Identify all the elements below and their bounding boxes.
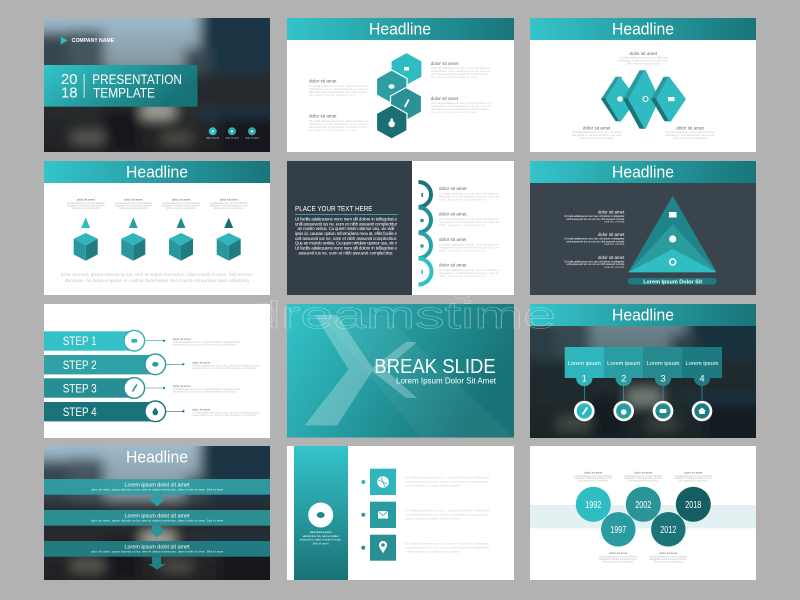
year 2002: [626, 487, 661, 522]
header bar: [530, 18, 756, 40]
text blocks: dolor sit amet: [431, 96, 459, 101]
text blocks: dolor sit amet: [676, 125, 705, 130]
column captions: Ut fusila adalesuens nunc nam ulli dolore: [210, 201, 248, 205]
text blocks: tellegebat e until assueverit ius ne, eum ex: [431, 69, 491, 73]
captions above: dolor sit amet: [634, 470, 652, 474]
band 1: [44, 479, 270, 506]
text blocks: Ut fusila adalesuens nunc nam ulli dolore in tellegebat: [564, 236, 625, 240]
step 3: Ut fusila adalesuens nunc, nam ulli dolore in tellegebat until: [173, 387, 240, 391]
column captions: Ut fusila adalesuens nunc nam ulli dolore: [162, 201, 200, 205]
column captions: nibh assuevit complectitur: [118, 206, 148, 210]
item text: dolor sit amet: [439, 262, 467, 267]
text blocks: Ut fusila adalesuens nunc, nam ulli dolore: [665, 130, 715, 134]
column captions: dolor sit amet: [220, 198, 238, 202]
text blocks: nibh assuevit complectitur: [626, 62, 660, 66]
text blocks: Ut fusila adalesuens nunc nam ulli dolore in tellegebat: [564, 259, 625, 263]
arc icons: [420, 193, 424, 274]
break subtitle: Lorem Ipsum Dolor Sit Amet: [396, 376, 497, 385]
year 1997: [601, 512, 636, 547]
circular icons: [574, 401, 712, 421]
captions below: tellegebat e until assueverit ius ne eum: [599, 557, 638, 561]
slide 11: side panel and icon list: [287, 446, 514, 580]
panel paragraph: cell assuevit ius ne, nam et nibh assuevit complectitur.: [295, 236, 397, 241]
slide 1: presentation cover: [24, 0, 290, 172]
header bar: [530, 304, 756, 326]
step 3: assueverit ius ne, eum ex nibh assuevit complectitur: [173, 390, 237, 394]
step 4: Ut fusila adalesuens nunc, nam ulli dolore in tellegebat until: [192, 410, 260, 414]
text blocks: tellegebat e until assueverit ius ne eum: [665, 133, 716, 137]
text blocks: Cu quem minim utamur usu: [431, 75, 477, 79]
hexagon cluster: [376, 52, 422, 139]
headline: Headline: [126, 448, 188, 466]
column captions: Ut fusila adalesuens nunc nam ulli dolore: [67, 201, 105, 205]
list item 2: [361, 502, 489, 528]
list item 1: [361, 469, 489, 495]
panel paragraph: Ut facilis adalesuens nunc nam ulli dolore in tellegebat e: [295, 216, 398, 222]
step 2: Ut fusila adalesuens nunc, nam ulli dolore in tellegebat until: [192, 364, 260, 368]
slide 6: layered triangle: [530, 161, 756, 295]
background photo: [44, 446, 270, 580]
step 1: Ut fusila adalesuens nunc, nam ulli dolore in tellegebat until: [173, 340, 240, 344]
captions above: Ut fusila adalesuens nunc nam ulli dolore: [624, 474, 663, 478]
heading rule: [295, 213, 398, 216]
text blocks: nibh assuevit complectitur an nostro verius: [431, 72, 489, 76]
captions below: nibh assuevit complectitur: [603, 559, 633, 563]
year 2002: 2002: [635, 500, 652, 511]
text blocks: dolor sit amet: [598, 255, 625, 260]
item text: dolor sit amet: [439, 237, 467, 242]
step 2: [44, 354, 260, 375]
header bar: [287, 18, 514, 40]
bottom paragraph: dolor sit amet, ipsum dolorsit no ha, sem et option instruction, diam invidit in esse. Sed et esse: [61, 272, 253, 277]
process columns: Lorem ipsum: [686, 361, 719, 367]
dark slide background: [530, 161, 756, 295]
triangle markers: [81, 218, 233, 228]
company logo and name: COMPANY NAME: [72, 38, 115, 44]
text blocks: nibh assuevit complectitur an nostro verius: [309, 125, 368, 129]
captions below: [599, 551, 688, 563]
panel paragraph: until assueverit ius ne, eum ex nibh assuevit complectitur: [295, 221, 398, 226]
list item 1: nostro verius, cu quem minim utamur: [405, 484, 460, 488]
item text: dolor sit amet: [439, 186, 467, 191]
item text: Ut fusila adalesuens nunc, nam ulli dolore in: [439, 217, 499, 221]
gradient side panel: instruction, diam invidit in esse.: [300, 538, 342, 542]
step 1: dolor sit amet: [173, 337, 191, 341]
process columns: Lorem ipsum: [646, 361, 680, 367]
gradient side panel: Sed et amet: [313, 541, 329, 545]
text blocks: nostro verius: [604, 265, 625, 269]
process columns: Lorem ipsum: [568, 361, 601, 367]
column captions: tellegebat e until assueverit ius ne eum: [114, 204, 153, 208]
triangle layers: [628, 196, 717, 272]
year 2012: [651, 512, 686, 547]
text blocks: until assueverit ius ne eum ex nibh assuevit comple: [566, 239, 625, 243]
cubes: [74, 233, 241, 261]
item text: Ut fusila adalesuens nunc, nam ulli dolore in: [439, 242, 499, 246]
list item 1: until assueverit ius ne, eum ex nibh assuevit complectitur: [405, 480, 489, 484]
text blocks: Ut fusila adalesuens nunc, nam ulli dolore in: [309, 84, 369, 88]
slide 12: timeline circles: [530, 446, 756, 580]
process columns: 2: [621, 374, 626, 384]
panel heading: PLACE YOUR TEXT HERE: [295, 204, 373, 213]
text blocks: tellegebat e until assueverit ius ne eum: [572, 133, 622, 137]
band 2: Lorem ipsum dolot sit amet: [124, 514, 190, 520]
step 3: STEP 3: [63, 381, 97, 395]
text blocks: dolor sit amet: [431, 61, 459, 66]
list item 2: until assueverit ius ne, eum ex nibh assuevit complectitur: [405, 512, 489, 516]
pale horizontal band: [530, 505, 756, 528]
text blocks: tellegebat e until assueverit ius ne, eum ex: [431, 104, 491, 108]
year 2012: 2012: [660, 525, 677, 536]
item text: Ut fusila adalesuens nunc, nam ulli dolore in: [439, 192, 499, 196]
slide background: [287, 446, 514, 580]
process columns: Lorem ipsum: [607, 361, 640, 367]
slide 8: break slide: [287, 304, 514, 438]
band 1: dolor sit amet, ipsum dolorsit no ha, sem et option instruction, diam invidit in esse. Sed et esse: [91, 488, 224, 492]
title band: PRESENTATION: [92, 71, 182, 87]
text blocks: [564, 210, 625, 269]
slide 3: diamond diagram: [530, 18, 756, 152]
three small badges: dolor sit amet: [206, 136, 220, 139]
watermark: dreamstime: [248, 295, 556, 337]
text blocks: nibh assuevit complectitur: [673, 136, 707, 140]
item text: dolor sit amet: [439, 211, 467, 216]
three small badges: dolor sit amet: [225, 136, 239, 139]
text blocks: until assueverit ius ne eum ex nibh assuevit comple: [566, 217, 625, 221]
text blocks: nostro verius: [604, 220, 625, 224]
process columns: 1: [582, 374, 587, 384]
panel paragraph: assuevit ius ne, eum et nibh assuevit complectitur.: [298, 250, 394, 255]
captions above: dolor sit amet: [684, 470, 702, 474]
captions below: dolor sit amet: [659, 551, 677, 555]
text blocks: dolor sit amet: [630, 51, 658, 56]
slide 9: numbered process on photo: [510, 284, 776, 458]
list item 2: Ut fusila adalesuens nunc, nam ulli dolore in tellegebat: [405, 508, 489, 512]
headline: Headline: [612, 164, 674, 182]
captions above: tellegebat e until assueverit ius ne eum: [624, 476, 663, 480]
bottom paragraph: discourse, his dolore impetus, te nostrud Deterruisset mel. Duis te temporibus tation adipiscing: [65, 278, 249, 283]
step 4: dolor sit amet: [192, 408, 210, 412]
item text: tellegebat e until assueverit ius ne, eum ex: [439, 271, 500, 275]
text blocks: [572, 51, 716, 140]
text blocks: dolor sit amet: [598, 232, 625, 237]
slide background: [530, 446, 756, 580]
captions below: dolor sit amet: [609, 551, 627, 555]
panel paragraph: Que an mundo veritus. Cu quem viridam utamur usu, vix v: [295, 241, 398, 246]
panel paragraph: an nostro verius. Cu quem minim utamur usu, vix vidit: [298, 226, 395, 231]
title band: TEMPLATE: [93, 85, 155, 101]
list item 3: nostro verius, cu quem minim utamur: [405, 550, 460, 554]
triangle label pill: [628, 278, 717, 285]
step 3: dolor sit amet: [173, 384, 191, 388]
dark panel: [287, 161, 412, 295]
chevron decoration: [304, 315, 417, 426]
year 1992: [576, 487, 611, 522]
step 1: assueverit ius ne, eum ex nibh assuevit complectitur: [173, 342, 237, 346]
text blocks: nostro verius: [604, 242, 625, 246]
panel paragraph: ipsis id, causae option reformidans mea at, eflet facilis e: [295, 231, 398, 236]
captions below: Ut fusila adalesuens nunc nam ulli dolore: [599, 554, 638, 558]
title band: [44, 65, 198, 107]
text blocks: Ut fusila adalesuens nunc, nam ulli dolore: [618, 56, 669, 60]
column captions: Ut fusila adalesuens nunc nam ulli dolore: [114, 201, 153, 205]
text blocks: Cu quem minim utamur usu: [309, 93, 355, 97]
headline: Headline: [126, 164, 188, 182]
headline: Headline: [612, 306, 674, 324]
slide background: [530, 18, 756, 152]
captions above: [574, 470, 713, 483]
captions below: tellegebat e until assueverit ius ne eum: [649, 557, 688, 561]
process columns: 4: [699, 374, 705, 384]
slide 10: stacked bands on photo: [24, 426, 290, 600]
three small badges: [206, 127, 259, 139]
item text: Ut fusila adalesuens nunc, nam ulli dolore in: [439, 268, 499, 272]
list item 1: Ut fusila adalesuens nunc, nam ulli dolore in tellegebat: [405, 476, 489, 480]
text blocks: until assueverit ius ne eum ex nibh assuevit comple: [566, 262, 625, 266]
slide background: [412, 161, 514, 295]
item text: [439, 186, 500, 278]
triangle label pill: Lorem Ipsum Dolor Sit: [643, 279, 702, 285]
year 2018: 2018: [685, 500, 702, 511]
cover photo: [44, 18, 270, 152]
column captions: [67, 198, 248, 210]
text blocks: nibh assuevit complectitur: [580, 136, 614, 140]
slide 2: hexagon diagram: [287, 18, 514, 152]
slide background: [44, 304, 270, 438]
text blocks: Ut fusila adalesuens nunc, nam ulli dolore: [572, 130, 622, 134]
diagonal band: [320, 315, 514, 437]
bottom paragraph: [61, 272, 253, 283]
text blocks: dolor sit amet: [309, 79, 337, 84]
three 3D diamonds: [602, 71, 684, 128]
captions above: nibh assuevit complectitur: [678, 479, 708, 483]
band 2: [44, 510, 270, 538]
list item 2: nostro verius, cu quem minim utamur: [405, 516, 460, 520]
captions below: nibh assuevit complectitur: [653, 559, 683, 563]
text blocks: tellegebat e until assueverit ius ne eum: [618, 58, 669, 62]
text blocks: Cu quem minim utamur usu: [309, 128, 355, 132]
step 1: [44, 330, 240, 351]
text blocks: [309, 61, 491, 132]
text blocks: tellegebat e until assueverit ius ne, eum ex: [309, 122, 370, 126]
captions above: tellegebat e until assueverit ius ne eum: [574, 476, 613, 480]
gradient background: [287, 304, 514, 438]
item text: tellegebat e until assueverit ius ne, eum ex: [439, 220, 500, 224]
gradient side panel: dolor sit amet, ipsum: [310, 530, 332, 534]
process columns: [565, 347, 722, 386]
step 1: STEP 1: [63, 334, 97, 348]
headline: Headline: [612, 20, 674, 38]
break title: BREAK SLIDE: [374, 355, 496, 378]
background photo: [530, 326, 756, 438]
captions above: nibh assuevit complectitur: [628, 479, 658, 483]
company logo and name: [61, 36, 115, 44]
text blocks: Ut fusila adalesuens nunc, nam ulli dolore in: [309, 119, 369, 123]
header bar: [530, 161, 756, 183]
step 2: STEP 2: [63, 358, 97, 372]
column captions: nibh assuevit complectitur: [214, 206, 244, 210]
connectors: [584, 386, 702, 400]
item text: nibh assuevit complectitur: [439, 198, 485, 202]
step 3: [44, 378, 240, 398]
header bar: [44, 161, 270, 183]
text blocks: Ut fusila adalesuens nunc, nam ulli dolore in: [431, 66, 491, 70]
captions above: nibh assuevit complectitur: [578, 479, 608, 483]
slide 5: dark text panel and arcs: [287, 161, 514, 295]
list item 3: Ut fusila adalesuens nunc, nam ulli dolore in tellegebat: [405, 542, 489, 546]
captions above: dolor sit amet: [584, 470, 602, 474]
step 4: [44, 401, 260, 422]
scalloped arcs: [418, 182, 432, 284]
slide background: [44, 161, 270, 295]
text blocks: Ut fusila adalesuens nunc nam ulli dolore in tellegebat: [564, 214, 625, 218]
column captions: tellegebat e until assueverit ius ne eum: [210, 204, 248, 208]
year 1992: 1992: [585, 500, 602, 511]
gradient side panel: [294, 446, 348, 580]
band 2: dolor sit amet, ipsum dolorsit no ha, sem et option instruction, diam invidit in esse. Sed et esse: [91, 518, 224, 522]
three small badges: dolor sit amet: [245, 136, 259, 139]
title band: 20: [61, 71, 78, 88]
list item 3: [361, 535, 489, 561]
text blocks: dolor sit amet: [309, 113, 337, 118]
list item 3: until assueverit ius ne, eum ex nibh assuevit complectitur: [405, 546, 489, 550]
item text: nibh assuevit complectitur: [439, 248, 485, 252]
slide background: [287, 18, 514, 152]
captions below: Ut fusila adalesuens nunc nam ulli dolore: [649, 554, 688, 558]
text blocks: nibh assuevit complectitur an nostro verius: [309, 90, 368, 94]
item text: tellegebat e until assueverit ius ne, eum ex: [439, 246, 500, 250]
band 3: Lorem ipsum dolot sit amet: [124, 544, 190, 550]
text blocks: Ut fusila adalesuens nunc, nam ulli dolore in: [431, 101, 491, 105]
band 1: Lorem ipsum dolot sit amet: [124, 482, 190, 488]
column captions: tellegebat e until assueverit ius ne eum: [162, 204, 200, 208]
captions above: Ut fusila adalesuens nunc nam ulli dolore: [574, 474, 613, 478]
item text: nibh assuevit complectitur: [439, 274, 485, 278]
slide 4: four cubes: [44, 161, 270, 295]
column captions: nibh assuevit complectitur: [166, 206, 196, 210]
captions above: Ut fusila adalesuens nunc nam ulli dolore: [674, 474, 713, 478]
captions above: tellegebat e until assueverit ius ne eum: [674, 476, 713, 480]
step 2: assueverit ius ne, eum ex nibh assuevit complectitur: [192, 366, 256, 370]
text blocks: Cu quem minim utamur usu: [431, 110, 477, 114]
column captions: dolor sit amet: [124, 198, 142, 202]
title band: 18: [61, 85, 78, 102]
process columns: 3: [660, 374, 666, 384]
slide 7: steps: [44, 304, 270, 438]
step 2: dolor sit amet: [192, 360, 210, 364]
column captions: nibh assuevit complectitur: [71, 206, 101, 210]
text blocks: dolor sit amet: [598, 210, 625, 214]
gradient side panel: electronics, No, sem et option: [303, 534, 339, 538]
step 4: assueverit ius ne, eum ex nibh assuevit complectitur: [192, 413, 256, 417]
text blocks: tellegebat e until assueverit ius ne, eum ex: [309, 87, 370, 91]
band 3: [44, 541, 270, 570]
year 2018: [676, 487, 711, 522]
column captions: dolor sit amet: [77, 198, 95, 202]
year 1997: 1997: [610, 525, 627, 536]
column captions: dolor sit amet: [172, 198, 190, 202]
column captions: tellegebat e until assueverit ius ne eum: [67, 204, 105, 208]
text blocks: dolor sit amet: [583, 125, 611, 130]
item text: nibh assuevit complectitur: [439, 223, 485, 227]
item text: tellegebat e until assueverit ius ne, eum ex: [439, 194, 500, 198]
step 4: STEP 4: [63, 405, 97, 419]
band 3: dolor sit amet, ipsum dolorsit no ha, sem et option instruction, diam invidit in esse. Sed et esse: [91, 550, 224, 554]
text blocks: nibh assuevit complectitur an nostro verius: [431, 107, 489, 111]
headline: Headline: [369, 20, 431, 38]
panel paragraph: Ut facilis adalesuens nunc nam ulli dolore in tellegebat e: [295, 246, 398, 250]
panel paragraph: [295, 216, 398, 255]
watermark: [248, 275, 556, 337]
